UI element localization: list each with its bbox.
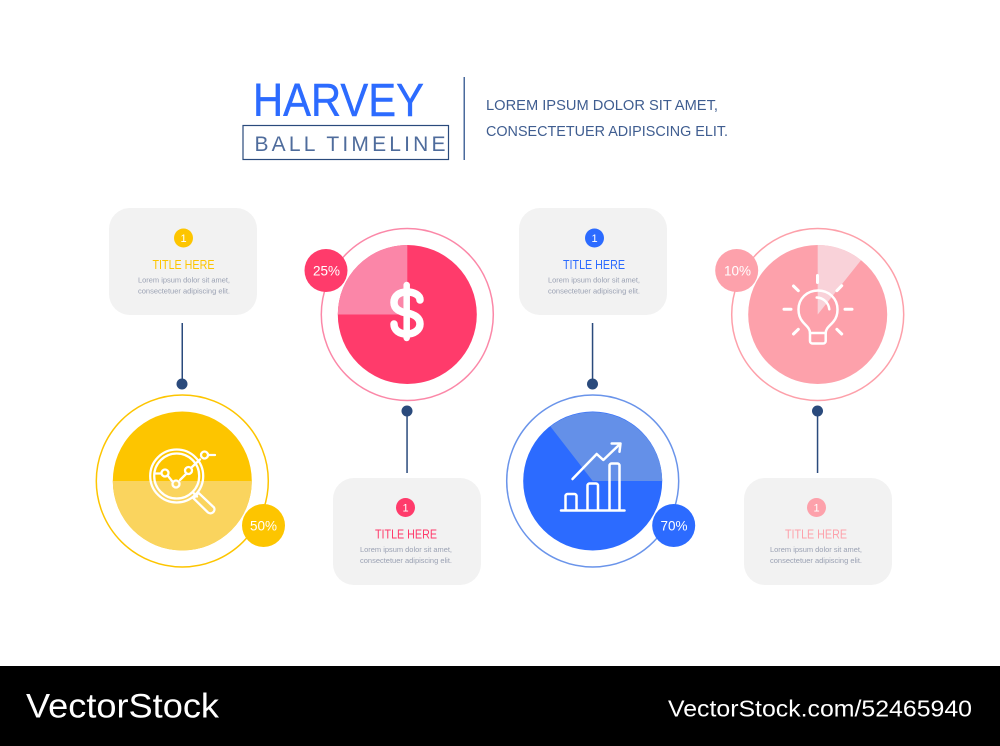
badge: 10%: 10% <box>724 264 751 278</box>
title: Harvey Ball Timeline: HARVEY <box>253 74 424 126</box>
pink card body: consectetuer adipiscing elit. <box>360 556 452 565</box>
badge: 70% <box>652 504 695 547</box>
icon: light bulb <box>784 276 852 344</box>
blue number badge <box>585 228 604 248</box>
badge: 50%: 50% <box>250 518 277 534</box>
pink number badge: 1 <box>402 502 409 514</box>
panel: yellow step card <box>109 208 257 315</box>
title: Harvey Ball Timeline <box>243 74 448 160</box>
blue number badge: 1 <box>591 233 598 245</box>
blue card body: consectetuer adipiscing elit. <box>548 286 640 296</box>
salmon card body: Lorem ipsum dolor sit amet, <box>770 545 862 554</box>
pink card title: TITLE HERE <box>375 528 437 542</box>
salmon card body <box>770 545 862 565</box>
blue card body <box>548 276 640 296</box>
panel: blue step card <box>519 208 667 315</box>
connector: salmon <box>812 406 823 473</box>
badge: 25%: 25% <box>313 264 340 278</box>
yellow number badge: 1 <box>180 233 187 245</box>
subtitle text: LOREM IPSUM DOLOR SIT AMET, <box>486 97 718 114</box>
yellow card body: Lorem ipsum dolor sit amet, <box>138 276 230 284</box>
blue card body: Lorem ipsum dolor sit amet, <box>548 276 640 284</box>
yellow card body <box>138 276 230 296</box>
salmon card title: TITLE HERE <box>785 528 847 542</box>
connector: yellow <box>176 323 188 390</box>
badge: 10% <box>715 249 758 292</box>
yellow card title: TITLE HERE <box>152 258 214 272</box>
pink card body <box>360 545 452 565</box>
harvey ball: blue 70% <box>507 395 695 567</box>
harvey ball: pink 25% <box>304 228 493 400</box>
harvey ball: yellow 50% <box>96 395 285 567</box>
pink card body: Lorem ipsum dolor sit amet, <box>360 545 452 554</box>
pink number badge <box>396 498 415 517</box>
yellow card body: consectetuer adipiscing elit. <box>138 286 230 296</box>
subtitle text <box>486 97 728 140</box>
icon: dollar sign <box>394 285 420 338</box>
footer url: VectorStock.com/52465940 <box>668 696 972 722</box>
vertical title divider <box>464 77 465 160</box>
salmon number badge: 1 <box>813 502 820 514</box>
yellow number badge <box>174 228 193 248</box>
footer brand: VectorStock <box>26 688 220 726</box>
blue card title: TITLE HERE <box>563 258 625 272</box>
harvey ball: salmon 10% <box>715 228 904 400</box>
badge: 70%: 70% <box>660 518 688 534</box>
title: Harvey Ball Timeline: BALL TIMELINE <box>254 133 446 156</box>
footer bar <box>0 666 1000 746</box>
panel: salmon step card <box>744 478 892 585</box>
badge: 50% <box>242 504 285 547</box>
subtitle text: CONSECTETUER ADIPISCING ELIT. <box>486 123 728 140</box>
panel: pink step card <box>333 478 481 585</box>
connector: pink <box>402 406 412 473</box>
badge: 25% <box>304 249 348 292</box>
icon: growth bar chart <box>561 444 624 510</box>
icon: magnifier with chart <box>150 450 215 513</box>
salmon number badge <box>807 498 826 517</box>
connector: blue <box>587 323 598 390</box>
salmon card body: consectetuer adipiscing elit. <box>770 556 862 565</box>
